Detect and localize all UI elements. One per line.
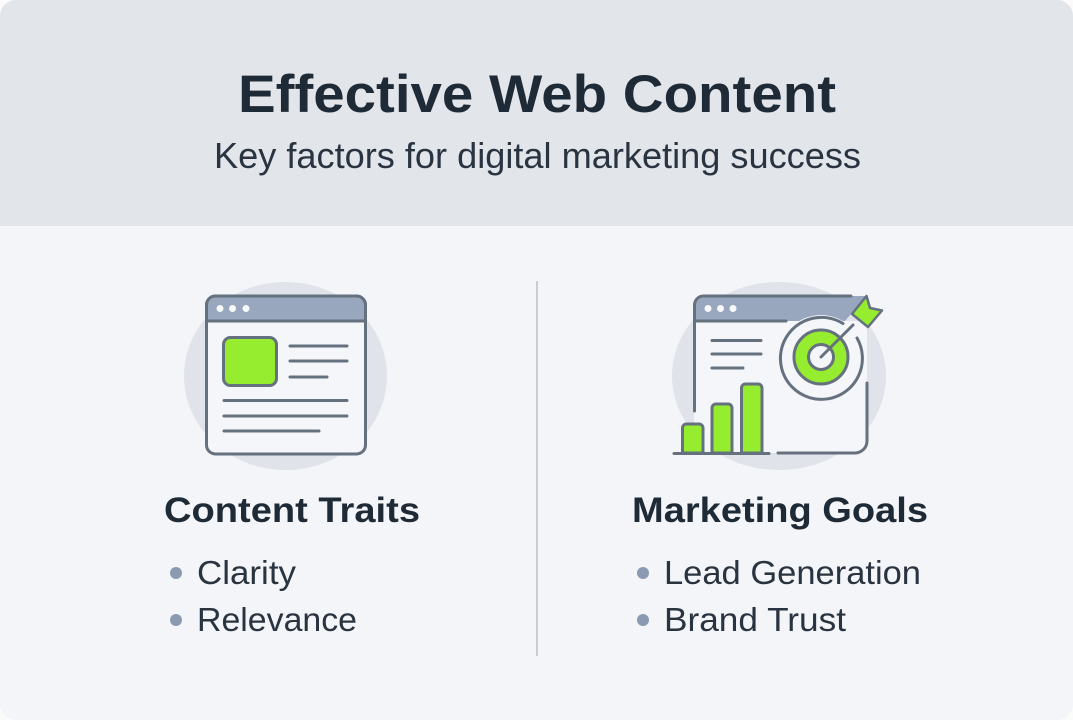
bars (682, 384, 762, 453)
divider (536, 281, 538, 656)
list item: clarity: Clarity (197, 554, 297, 591)
title: Effective Web Content (238, 65, 836, 124)
heading: content traits: Content Traits (164, 491, 420, 530)
icon: web page with chart and target (672, 282, 886, 470)
panel: card background (0, 0, 1073, 226)
icon: web page layout (184, 282, 387, 470)
list item: brand trust: Brand Trust (664, 601, 846, 638)
panel: content traits (164, 282, 420, 638)
subtitle: Key factors for digital marketing success (214, 135, 861, 176)
target (778, 296, 882, 401)
header: title and subtitle (214, 65, 861, 176)
list item: lead generation: Lead Generation (664, 554, 921, 591)
heading: marketing goals: Marketing Goals (632, 491, 928, 530)
list item: relevance: Relevance (197, 601, 357, 638)
panel: marketing goals (632, 282, 928, 638)
